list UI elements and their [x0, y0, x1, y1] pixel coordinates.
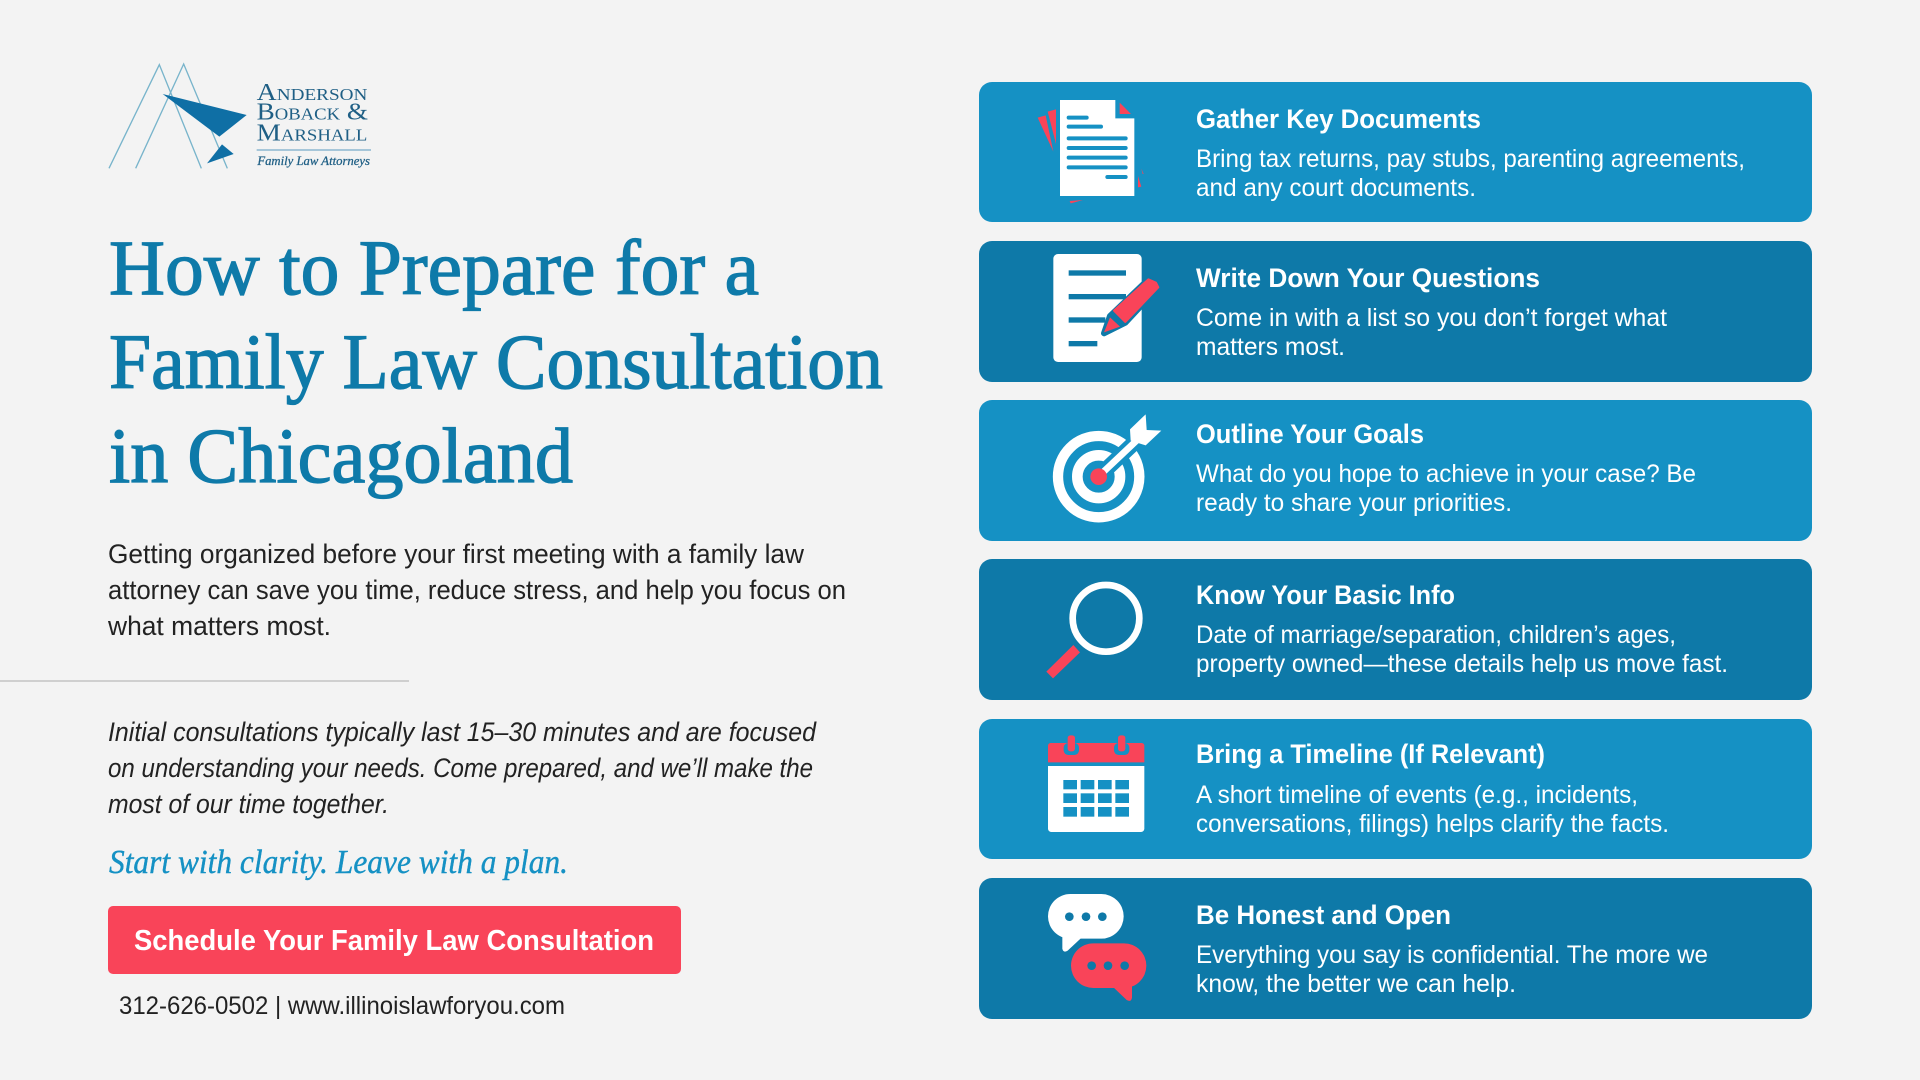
- heading and description: and any court documents.: [1196, 174, 1476, 202]
- icon: note and pencil: [1053, 254, 1158, 362]
- logo: Anderson Boback & Marshall: Family Law Attorneys: [256, 154, 370, 168]
- contact line: 312-626-0502 | www.illinoislawforyou.com: [119, 992, 565, 1020]
- heading and description: Know Your Basic Info: [1196, 580, 1455, 610]
- title: in Chicagoland: [109, 412, 573, 499]
- heading and description: [1196, 263, 1667, 361]
- intro paragraph: attorney can save you time, reduce stress, and help you focus on: [108, 575, 846, 605]
- heading and description: Date of marriage/separation, children’s ages,: [1196, 621, 1676, 649]
- heading and description: conversations, filings) helps clarify the facts.: [1196, 810, 1669, 838]
- heading and description: matters most.: [1196, 333, 1345, 361]
- logo: Anderson Boback & Marshall: Marshall: [257, 120, 367, 147]
- heading and description: [1196, 104, 1745, 202]
- heading and description: Be Honest and Open: [1196, 900, 1451, 930]
- italic note: most of our time together.: [108, 789, 389, 819]
- intro paragraph: [107, 539, 846, 641]
- icon: speech bubbles: [1048, 894, 1146, 1001]
- logo: Anderson Boback & Marshall: Anderson: [257, 79, 367, 106]
- tagline: Start with clarity. Leave with a plan.: [109, 844, 568, 881]
- heading and description: [1196, 419, 1696, 517]
- italic note: [108, 717, 817, 819]
- title: [109, 224, 883, 499]
- heading and description: Write Down Your Questions: [1196, 263, 1540, 293]
- call to action button: Schedule Your Family Law Consultation: [134, 925, 654, 957]
- heading and description: Gather Key Documents: [1196, 104, 1481, 134]
- panel: gather key documents: [979, 82, 1812, 222]
- heading and description: [1196, 739, 1669, 838]
- call to action button: [108, 906, 681, 974]
- title: How to Prepare for a: [109, 224, 759, 311]
- icon: magnifying glass: [1046, 585, 1139, 678]
- heading and description: Everything you say is confidential. The more we: [1196, 941, 1708, 969]
- heading and description: Outline Your Goals: [1196, 419, 1424, 449]
- icon: documents: [1038, 100, 1144, 203]
- title: Family Law Consultation: [109, 318, 883, 405]
- intro paragraph: what matters most.: [107, 611, 331, 641]
- heading and description: [1196, 580, 1728, 678]
- heading and description: know, the better we can help.: [1196, 970, 1516, 998]
- panel: be honest and open: [979, 878, 1812, 1019]
- logo: Anderson Boback & Marshall: [109, 64, 371, 168]
- heading and description: ready to share your priorities.: [1196, 489, 1512, 517]
- italic note: on understanding your needs. Come prepared, and we’ll make the: [108, 753, 813, 783]
- panel: bring a timeline: [979, 719, 1812, 859]
- logo: Anderson Boback & Marshall: Boback &: [257, 98, 368, 125]
- heading and description: What do you hope to achieve in your case? Be: [1196, 460, 1696, 488]
- heading and description: [1196, 900, 1708, 998]
- italic note: Initial consultations typically last 15–30 minutes and are focused: [108, 717, 817, 747]
- heading and description: A short timeline of events (e.g., incidents,: [1196, 781, 1638, 809]
- heading and description: Bring tax returns, pay stubs, parenting agreements,: [1196, 145, 1745, 173]
- heading and description: property owned—these details help us move fast.: [1196, 650, 1728, 678]
- icon: calendar: [1048, 735, 1144, 832]
- panel: outline your goals: [979, 400, 1812, 541]
- heading and description: Come in with a list so you don’t forget what: [1196, 304, 1667, 332]
- intro paragraph: Getting organized before your first meeting with a family law: [108, 539, 805, 569]
- panel: know your basic info: [979, 559, 1812, 700]
- panel: write down your questions: [979, 241, 1812, 382]
- heading and description: Bring a Timeline (If Relevant): [1196, 739, 1545, 769]
- icon: target and arrow: [1058, 414, 1161, 517]
